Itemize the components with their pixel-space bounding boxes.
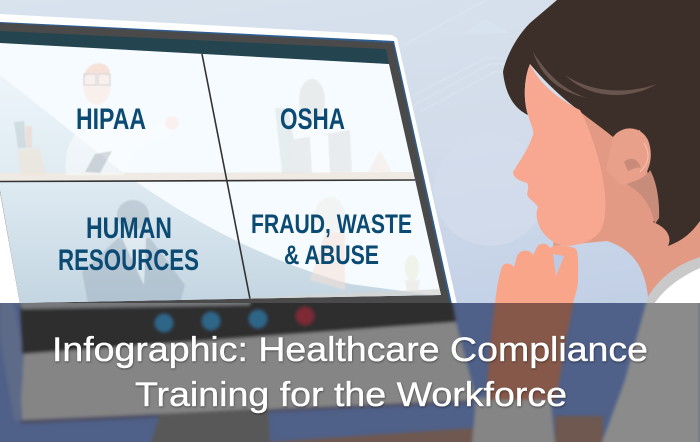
laptop white outer edge: [0, 14, 457, 304]
desk strips: [0, 172, 414, 181]
faint man figure: [82, 200, 185, 303]
faint woman figure: [275, 79, 392, 173]
laptop teal header bar: [0, 31, 389, 65]
title: [52, 331, 648, 414]
laptop dark bezel: [20, 300, 456, 354]
gap between fingers: [553, 254, 564, 276]
grey sleeve lower: [472, 392, 555, 442]
neck: [553, 110, 700, 297]
label: HIPAA: HIPAA: [76, 103, 146, 136]
label: OSHA: OSHA: [280, 103, 345, 136]
laptop blue edge line: [0, 22, 452, 304]
title: Training for the Workforce: [135, 376, 567, 414]
label: Fraud, Waste and Abuse: & ABUSE: [284, 240, 379, 270]
forearm: [486, 300, 574, 400]
title bar with blurred laptop and desk behind: [0, 296, 700, 442]
laptop body: [19, 322, 474, 421]
hand at chin: [495, 244, 578, 304]
woman in profile: [495, 0, 700, 304]
hair: [503, 0, 700, 246]
laptop grey bezel: [0, 23, 450, 304]
faint doctor figure: [14, 63, 180, 175]
grey sleeve right: [601, 300, 700, 442]
title: Infographic: Healthcare Compliance: [52, 331, 648, 369]
blurred screen bottom edge: [18, 303, 252, 312]
faint presenter and plant: [310, 197, 420, 292]
label: Human Resources: RESOURCES: [58, 244, 199, 277]
label: Human Resources: [58, 212, 199, 277]
horizontal divider: [0, 180, 416, 182]
screen background: [0, 40, 450, 305]
call buttons: [155, 314, 173, 332]
label: Fraud, Waste and Abuse: FRAUD, WASTE: [251, 209, 412, 239]
label: Fraud, Waste and Abuse: [251, 209, 412, 270]
laptop left edge: [0, 296, 24, 422]
laptop stand: [150, 408, 270, 442]
hair highlights: [533, 52, 587, 98]
ear: [606, 128, 651, 185]
label: Human Resources: HUMAN: [86, 212, 172, 245]
neck shadow under ear: [626, 170, 659, 224]
background pattern: faint arrow and circuit lines: [404, 0, 546, 246]
white shirt and collar: [645, 256, 700, 304]
face: [513, 64, 605, 246]
laptop: [0, 14, 457, 305]
lower desk strip: [250, 289, 441, 299]
screen: [0, 40, 450, 305]
bar base: [0, 303, 700, 442]
desk: [555, 416, 603, 442]
vertical divider: [202, 54, 251, 304]
screen diagonal shade: [0, 75, 441, 305]
